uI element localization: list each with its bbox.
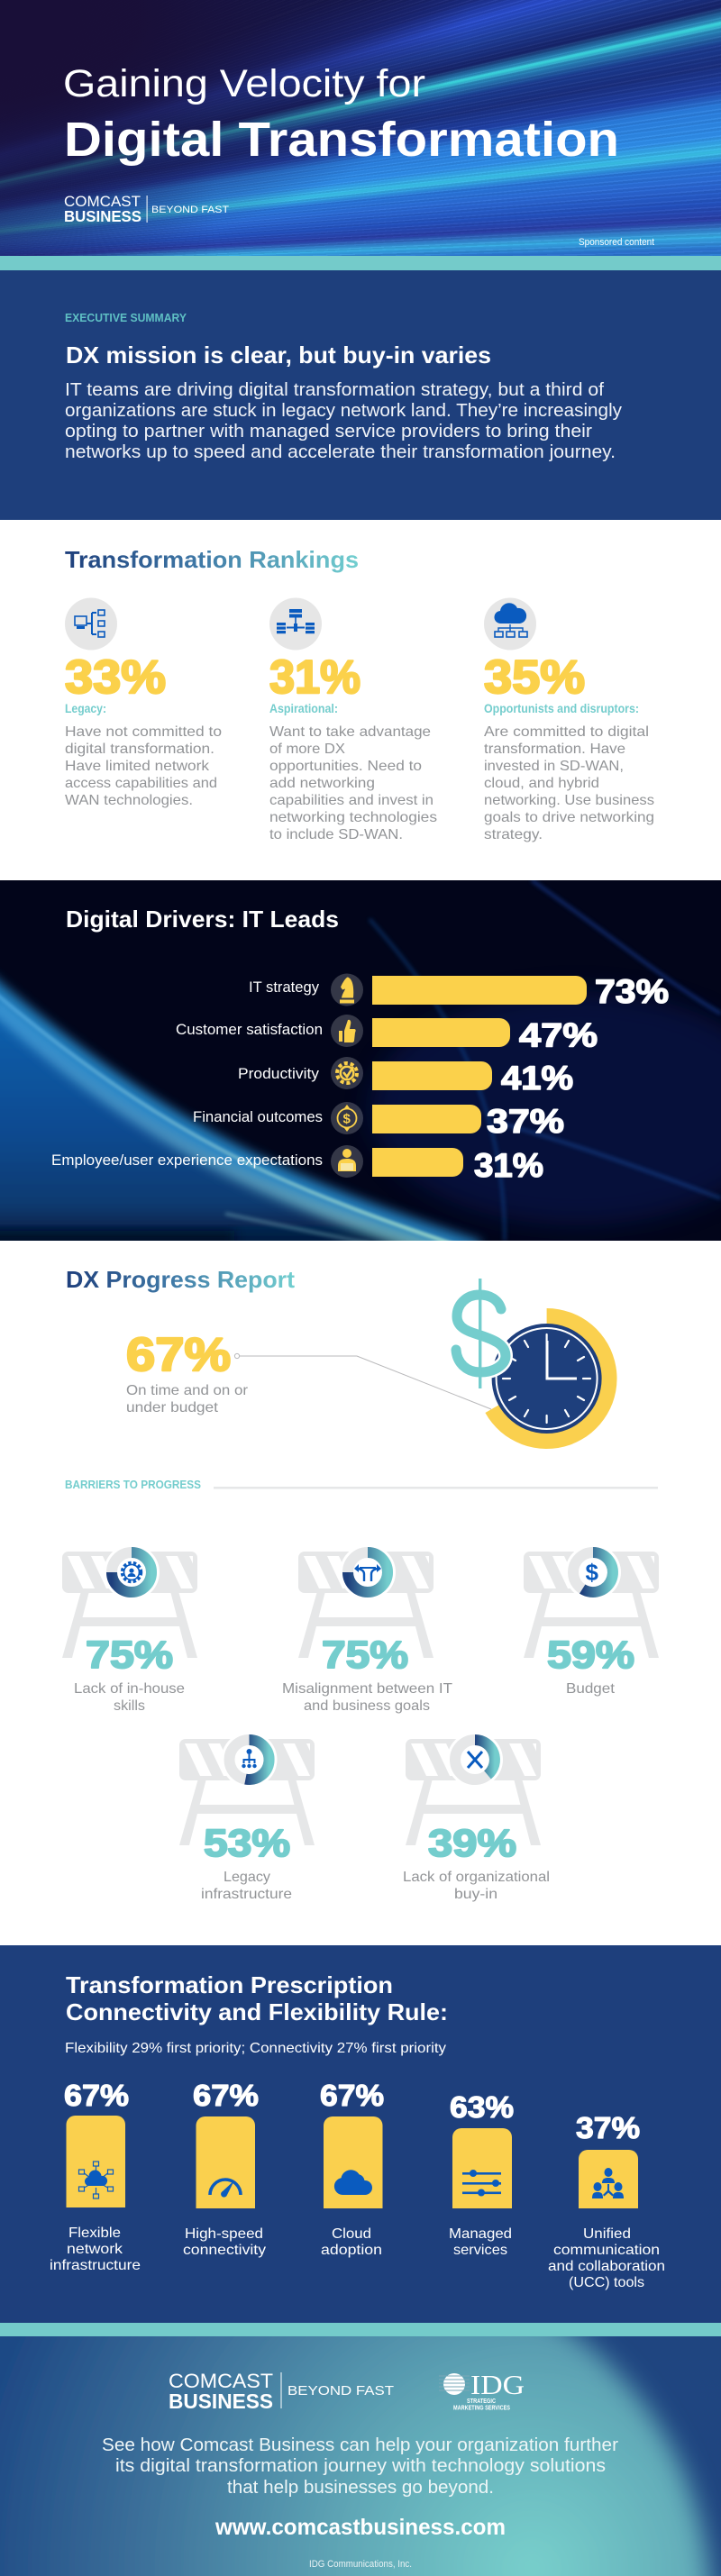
drivers heading: Digital Drivers: IT Leads: [66, 906, 339, 933]
Comcast Business logo: COMCAST: [64, 194, 141, 210]
barrier: budget: 59%: [547, 1634, 634, 1677]
column: flexible network infrastructure: 67%: [64, 2079, 129, 2112]
column: unified communication: Unified: [583, 2226, 631, 2242]
ranking: aspirational: [269, 598, 437, 842]
summary text: [65, 380, 622, 462]
description: [484, 724, 654, 842]
description: WAN technologies.: [65, 793, 193, 808]
prescription heading: Connectivity and Flexibility Rule:: [66, 1998, 448, 2025]
description: capabilities and invest in: [269, 793, 434, 808]
callout leader line: [234, 1353, 491, 1409]
stat: on time and on budget: under budget: [126, 1400, 219, 1415]
description: goals to drive networking: [484, 810, 654, 825]
call to action text: its digital transformation journey with technology solutions: [115, 2456, 606, 2476]
stat: on time and on budget: On time and on or: [126, 1383, 249, 1398]
description: transformation. Have: [484, 742, 625, 757]
call to action text: that help businesses go beyond.: [227, 2478, 494, 2498]
row: financial outcomes: 37%: [487, 1103, 564, 1140]
row: financial outcomes: Financial outcomes: [193, 1108, 323, 1125]
prescription heading: [66, 1971, 448, 2025]
percentage: 35%: [484, 651, 585, 704]
column: flexible network infrastructure: infrastructure: [50, 2258, 141, 2273]
icon: chess knight: [331, 973, 363, 1006]
barrier: legacy infrastructure: 53%: [204, 1822, 290, 1865]
IDG logo: IDG: [470, 2369, 525, 2400]
column: managed services: [449, 2090, 514, 2258]
Comcast Business logo: BEYOND FAST: [151, 205, 229, 215]
barrier: misalignment: and business goals: [304, 1698, 430, 1714]
segment label: Aspirational:: [269, 702, 338, 715]
description: networking technologies: [269, 810, 437, 825]
barrier: misalignment: [282, 1544, 452, 1714]
summary text: IT teams are driving digital transformation strategy, but a third of: [65, 380, 604, 400]
column: managed services: services: [453, 2243, 507, 2258]
column: high-speed connectivity: connectivity: [183, 2243, 266, 2258]
description: add networking: [269, 776, 375, 791]
IDG logo: STRATEGIC: [467, 2399, 496, 2405]
column: unified communication: communication: [553, 2243, 660, 2258]
row: productivity: Productivity: [238, 1065, 320, 1082]
panel: footer call to action: [0, 2336, 721, 2576]
description: Have not committed to: [65, 724, 222, 740]
Comcast Business logo: BUSINESS: [64, 207, 141, 225]
summary text: organizations are stuck in legacy network land. They’re increasingly: [65, 401, 622, 421]
row: IT strategy: IT strategy: [249, 979, 319, 996]
copyright: IDG Communications, Inc.: [309, 2559, 412, 2570]
description: of more DX: [269, 742, 345, 757]
column: managed services: 63%: [450, 2090, 514, 2124]
barrier: lack of buy-in: [403, 1732, 550, 1902]
barriers heading: BARRIERS TO PROGRESS: [65, 1479, 201, 1491]
icon: X donut 39%: [447, 1732, 503, 1788]
icon: org chart donut 53%: [222, 1732, 278, 1788]
progress heading: DX Progress Report: [66, 1266, 295, 1293]
Comcast Business logo: [169, 2370, 394, 2413]
barrier: budget: [524, 1544, 659, 1697]
row: employee experience: 31%: [474, 1147, 543, 1184]
summary text: networks up to speed and accelerate their transformation journey.: [65, 442, 616, 462]
description: to include SD-WAN.: [269, 827, 403, 842]
barrier: legacy infrastructure: Legacy: [224, 1870, 270, 1885]
percentage: 31%: [269, 651, 360, 704]
column: cloud adoption: 67%: [320, 2079, 384, 2112]
description: opportunities. Need to: [269, 759, 422, 774]
barrier: lack of buy-in: Lack of organizational: [403, 1870, 550, 1885]
column: managed services: Managed: [449, 2226, 512, 2242]
Comcast Business logo: BUSINESS: [169, 2389, 273, 2413]
column: cloud adoption: adoption: [321, 2243, 382, 2258]
icon: speedometer: [210, 2180, 241, 2198]
title: Gaining Velocity for: [63, 62, 425, 105]
column: unified communication: [548, 2111, 665, 2290]
stat: on time and on budget: 67%: [126, 1329, 231, 1381]
barrier: lack of buy-in: buy-in: [454, 1887, 497, 1902]
column: flexible network infrastructure: [50, 2079, 141, 2273]
row: IT strategy: 73%: [595, 973, 669, 1010]
panel: transformation prescription: [0, 1945, 721, 2323]
column: high-speed connectivity: [183, 2079, 266, 2258]
summary text: opting to partner with managed service providers to bring their: [65, 422, 592, 441]
stat: on time and on budget: [126, 1329, 249, 1415]
icon: gear with check: [331, 1057, 363, 1089]
website link: www.comcastbusiness.com: [214, 2515, 506, 2540]
barrier: misalignment: 75%: [322, 1634, 408, 1677]
barrier: lack of skills: 75%: [86, 1634, 173, 1677]
description: [269, 724, 437, 842]
title: Digital Transformation: [64, 113, 619, 167]
description: Want to take advantage: [269, 724, 431, 740]
column: cloud adoption: Cloud: [332, 2226, 371, 2242]
description: Have limited network: [65, 759, 210, 774]
barrier: lack of skills: Lack of in-house: [74, 1681, 185, 1697]
teal divider band: [0, 256, 721, 270]
row: customer satisfaction: [176, 1015, 598, 1054]
summary heading: DX mission is clear, but buy-in varies: [66, 341, 491, 369]
ranking: legacy: [65, 598, 222, 808]
segment label: Legacy:: [65, 702, 106, 715]
barrier: legacy infrastructure: [179, 1732, 315, 1902]
column: unified communication: (UCC) tools: [569, 2275, 644, 2290]
icon: cloud network: [484, 598, 536, 651]
segment label: Opportunists and disruptors:: [484, 702, 639, 715]
description: networking. Use business: [484, 793, 654, 808]
row: productivity: [238, 1057, 573, 1097]
priority note: Flexibility 29% first priority; Connectivity 27% first priority: [65, 2041, 446, 2056]
row: customer satisfaction: Customer satisfaction: [176, 1021, 323, 1038]
column: high-speed connectivity: 67%: [193, 2079, 259, 2112]
icon: connected people: [592, 2168, 624, 2198]
row: IT strategy: [249, 973, 669, 1010]
panel: digital drivers: [0, 880, 721, 1257]
row: productivity: 41%: [501, 1060, 573, 1097]
icon: dollar cycle: $: [342, 1112, 351, 1126]
panel: DX progress report: [0, 1241, 721, 1945]
row: financial outcomes: [193, 1102, 564, 1140]
column: unified communication: 37%: [576, 2111, 640, 2144]
bar chart: digital drivers: [51, 973, 669, 1184]
icon: person at laptop: [331, 1145, 363, 1178]
icon: dollar cycle: [331, 1102, 363, 1134]
title: [63, 62, 619, 167]
icon: thumbs up: [331, 1015, 363, 1047]
description: [65, 724, 222, 808]
barrier: lack of skills: skills: [114, 1698, 145, 1714]
icon: cloud: [334, 2170, 372, 2195]
description: invested in SD-WAN,: [484, 759, 624, 774]
barrier: budget: Budget: [566, 1681, 616, 1697]
column: cloud adoption: [320, 2079, 384, 2258]
row: customer satisfaction: 47%: [519, 1016, 598, 1054]
icon: clock and dollar: [456, 1279, 617, 1449]
icon: sliders: [462, 2170, 501, 2197]
icon: dollar donut 59%: [565, 1544, 621, 1600]
section eyebrow: EXECUTIVE SUMMARY: [65, 312, 187, 324]
panel: header: [63, 62, 654, 248]
Comcast Business logo: COMCAST: [169, 2370, 273, 2392]
sponsored content note: Sponsored content: [579, 237, 654, 248]
rankings heading: Transformation Rankings: [65, 546, 359, 573]
description: access capabilities and: [65, 776, 217, 791]
percentage: 33%: [65, 651, 166, 704]
panel: transformation rankings: [0, 520, 721, 880]
IDG logo: [439, 2369, 525, 2411]
barrier: misalignment: Misalignment between IT: [282, 1681, 452, 1697]
column: flexible network infrastructure: network: [67, 2242, 123, 2257]
column: unified communication: and collaboration: [548, 2259, 665, 2274]
description: digital transformation.: [65, 742, 214, 757]
icon: dollar donut 59%: $: [586, 1559, 598, 1586]
column: high-speed connectivity: High-speed: [185, 2226, 263, 2242]
call to action text: [102, 2435, 618, 2498]
barrier: lack of skills: [62, 1544, 197, 1714]
icon: diverging arrows donut 75%: [340, 1544, 396, 1600]
prescription heading: Transformation Prescription: [66, 1971, 393, 1998]
description: cloud, and hybrid: [484, 776, 599, 791]
row: employee experience: Employee/user experience expectations: [51, 1151, 323, 1169]
barrier: legacy infrastructure: infrastructure: [201, 1887, 292, 1902]
description: strategy.: [484, 827, 543, 842]
call to action text: See how Comcast Business can help your organization further: [102, 2435, 618, 2455]
header background: light rays: [0, 0, 721, 256]
IDG logo: MARKETING SERVICES: [453, 2406, 510, 2411]
Comcast Business logo: [64, 194, 229, 225]
icon: gear donut 75%: [104, 1544, 160, 1600]
row: employee experience: [51, 1145, 543, 1184]
barrier: lack of buy-in: 39%: [428, 1822, 516, 1865]
Comcast Business logo: BEYOND FAST: [287, 2384, 394, 2399]
icon: server hierarchy: [269, 598, 322, 651]
icon: cloud with devices: [79, 2162, 114, 2198]
description: Are committed to digital: [484, 724, 649, 740]
column: flexible network infrastructure: Flexible: [68, 2226, 121, 2241]
panel: executive summary: [0, 270, 721, 520]
teal divider band: [0, 2323, 721, 2336]
ranking: opportunists and disruptors: [484, 598, 654, 842]
icon: computers network: [65, 598, 117, 651]
